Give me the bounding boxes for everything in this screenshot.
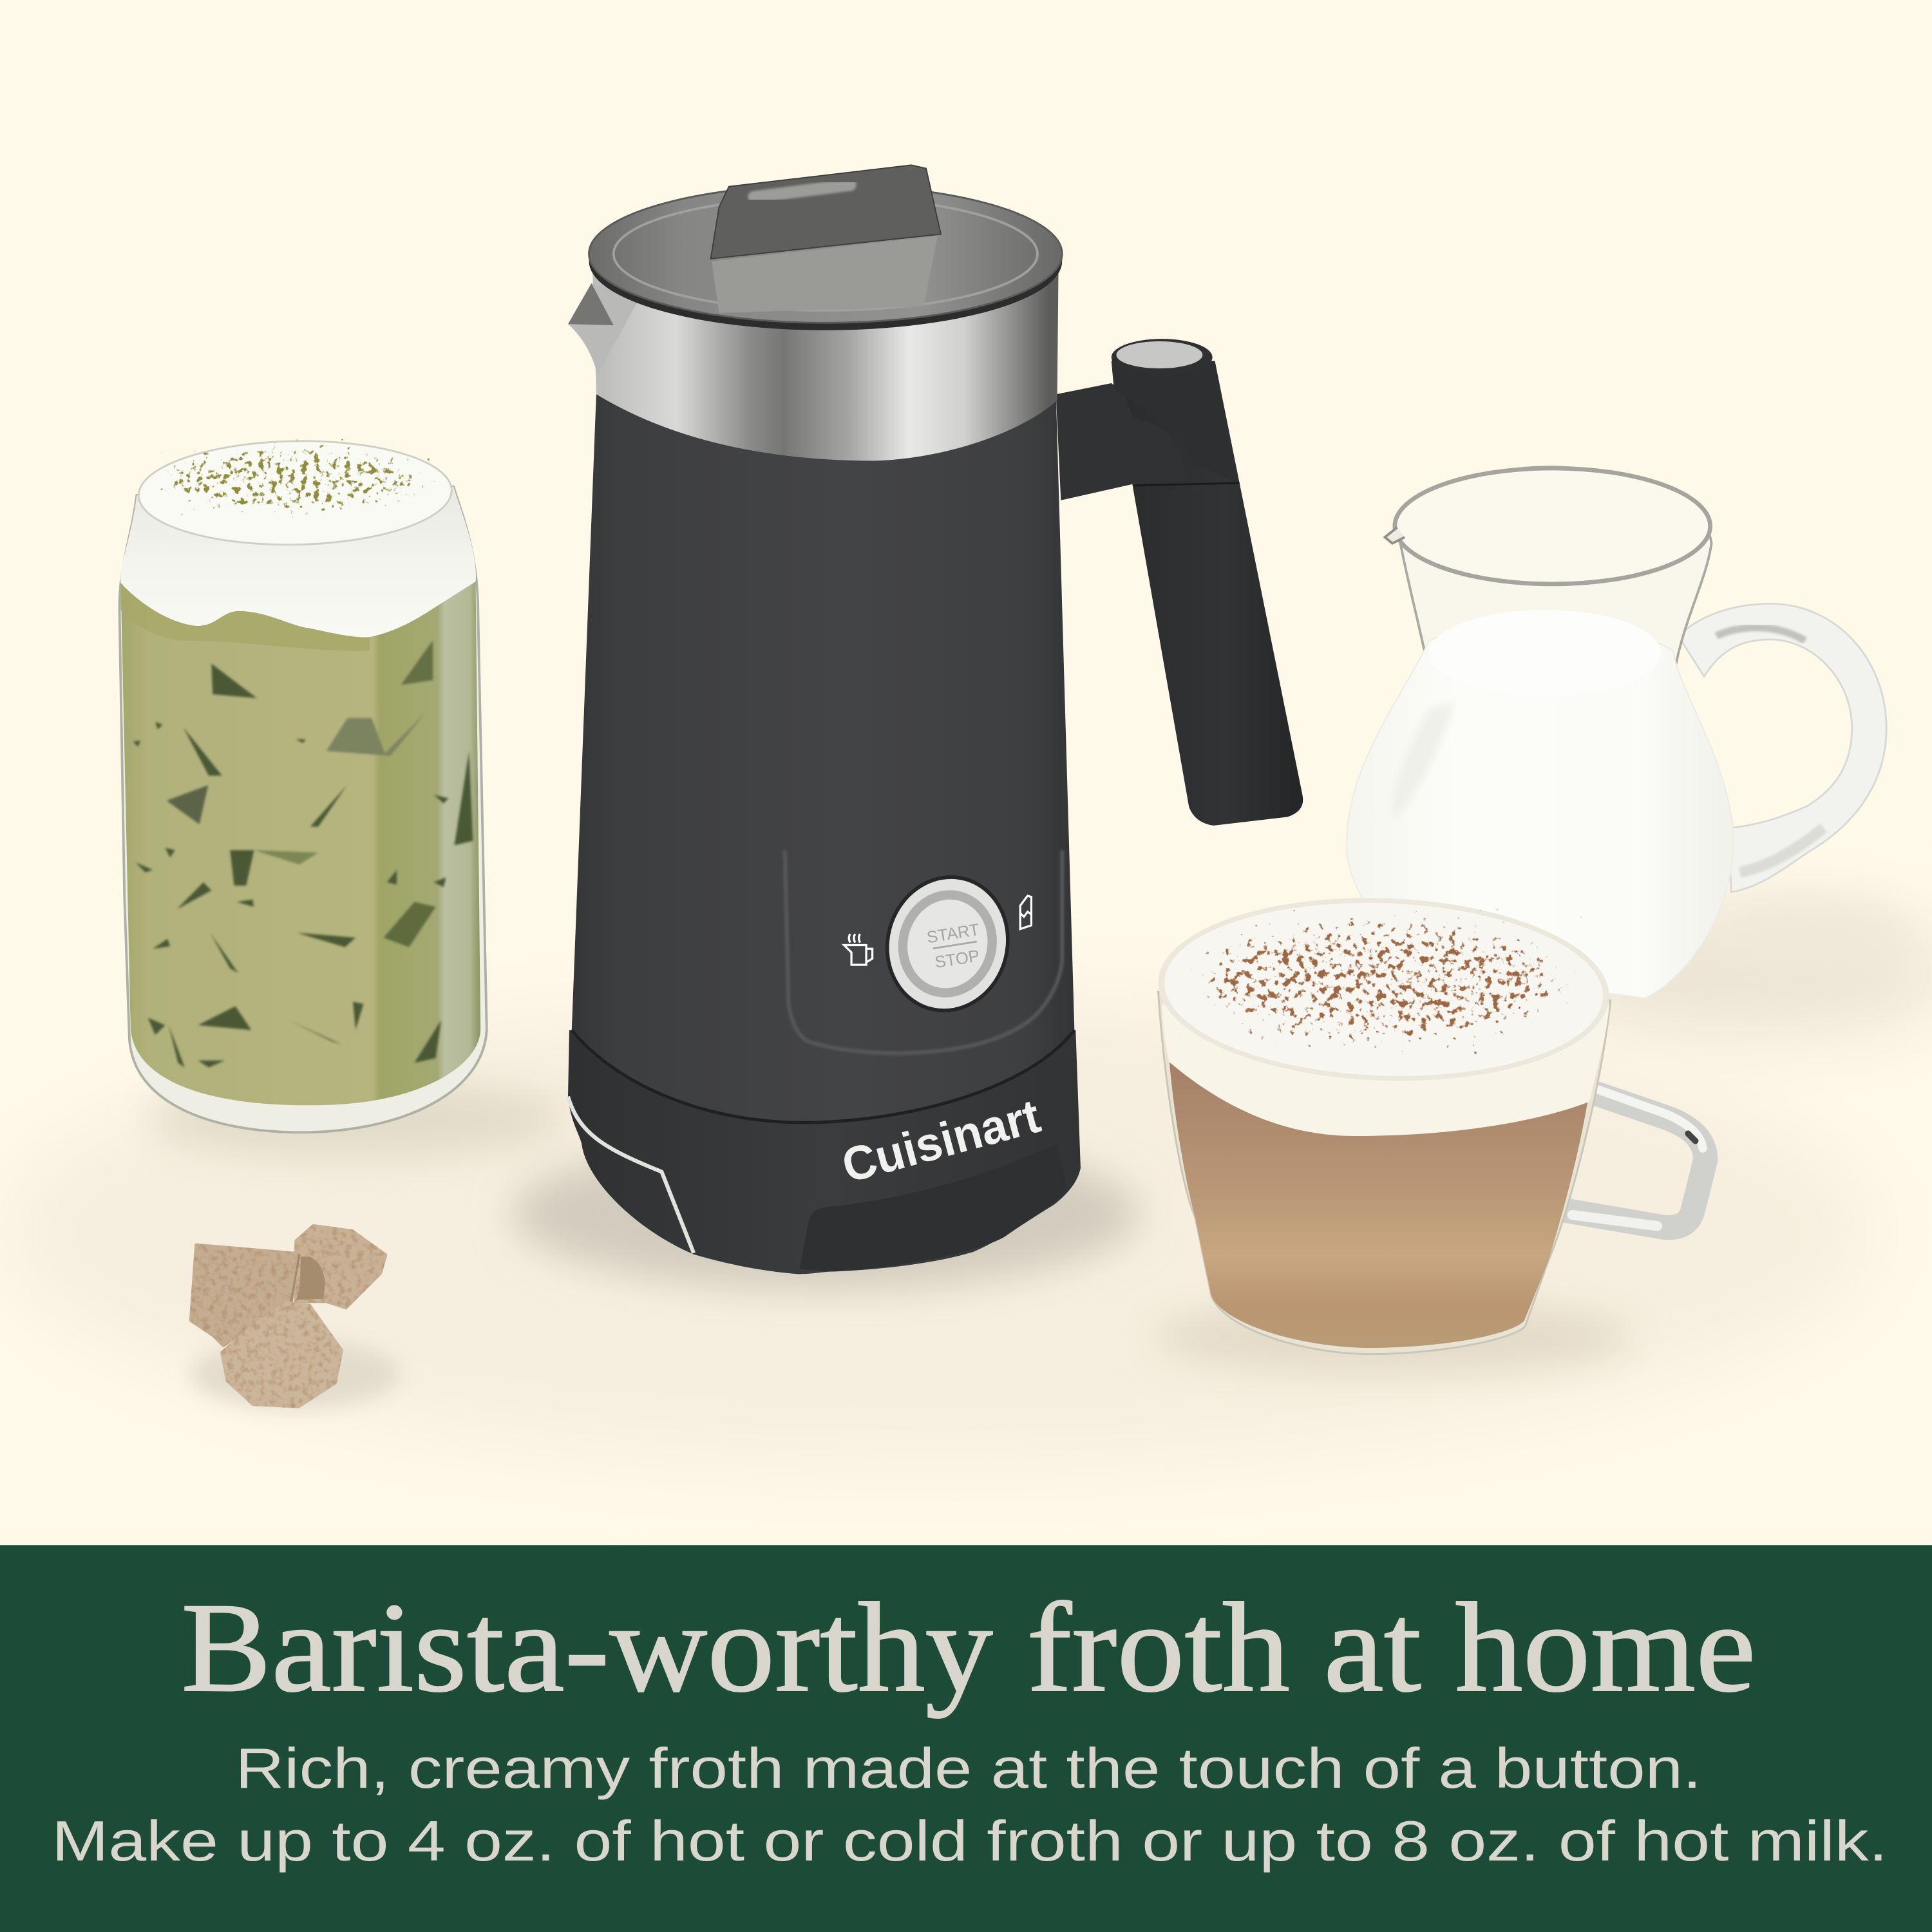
cup body with coffee — [1158, 992, 1611, 1354]
milk foam — [120, 487, 476, 638]
foam top — [138, 439, 453, 547]
jug milk — [1347, 623, 1734, 998]
floor tone and shadows — [0, 900, 1932, 1466]
sugar cubes — [191, 1226, 385, 1406]
matcha liquid — [121, 582, 480, 1105]
handle grip — [1112, 361, 1303, 826]
lid tab — [711, 165, 941, 313]
base recess — [800, 1144, 1067, 1271]
liquid top band — [121, 583, 370, 651]
frother body — [572, 392, 1074, 1122]
icon: milk carton — [1020, 896, 1031, 929]
jug handle — [1678, 604, 1886, 892]
control recess — [785, 850, 1062, 1053]
subheading line 1: Rich, creamy froth made at the touch of a button. — [235, 1736, 1701, 1800]
steel collar — [592, 274, 1058, 461]
milk jug — [1347, 467, 1886, 998]
heading: Barista-worthy froth at home — [181, 1577, 1756, 1719]
start stop button — [870, 861, 1025, 1027]
iced matcha glass — [119, 439, 487, 1132]
handle top button — [1112, 339, 1213, 376]
spout — [568, 283, 641, 375]
jug glass neck — [1399, 467, 1712, 665]
cup handle — [1562, 1089, 1705, 1227]
silver stripe — [568, 1097, 694, 1253]
subheading line 2: Make up to 4 oz. of hot or cold froth or up to 8 oz. of hot milk. — [52, 1809, 1888, 1873]
brand logo: Cuisinart — [837, 1088, 1046, 1193]
latte cup — [1155, 891, 1705, 1354]
right cube — [296, 1226, 385, 1307]
milk surface — [1429, 610, 1661, 696]
lid — [589, 185, 1062, 330]
green caption band — [0, 1545, 1932, 1932]
jug rim — [1395, 468, 1710, 584]
glass outline — [119, 487, 487, 1132]
milk foam layer — [1162, 1004, 1609, 1136]
handle arm — [1056, 383, 1189, 500]
ice cubes — [133, 640, 473, 1068]
start stop button: STOP — [934, 947, 981, 972]
cinnamon — [1198, 919, 1567, 1043]
foam top — [1155, 891, 1612, 1088]
jug reflection — [1392, 703, 1454, 819]
milk frother — [568, 165, 1303, 1274]
matcha powder — [160, 446, 426, 513]
front cube — [222, 1303, 341, 1406]
start stop button: START — [925, 921, 981, 947]
frother base — [568, 1030, 1081, 1274]
icon: hot cup — [844, 934, 873, 965]
left cube — [191, 1245, 298, 1345]
